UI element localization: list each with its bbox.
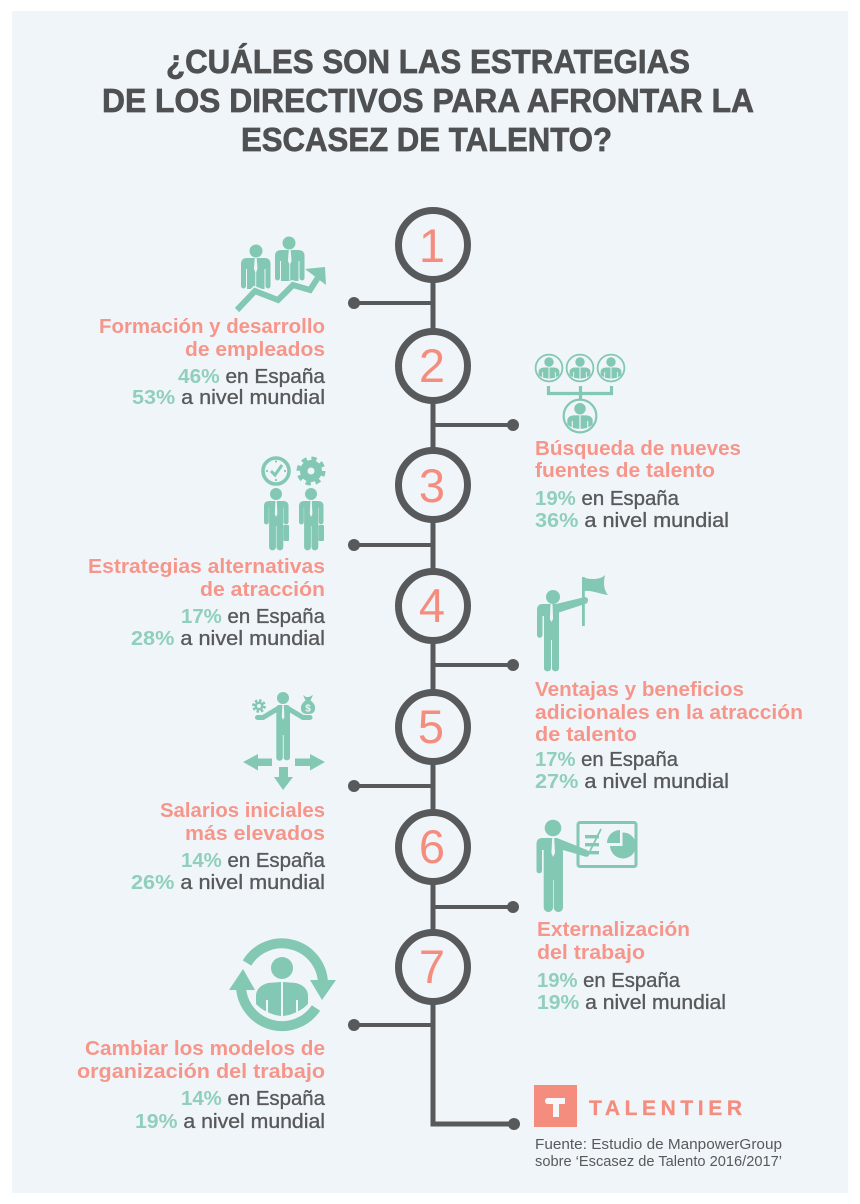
numbered circles: 4	[419, 579, 445, 632]
text block: step 4: 17% en España	[535, 748, 679, 771]
text block: step 3: 17% en España	[181, 605, 326, 628]
text block: step 6: del trabajo	[537, 941, 645, 964]
text block: step 3: 28% a nivel mundial	[131, 627, 325, 650]
timeline: vertical line, branches and end dots	[348, 245, 520, 1130]
text block: step 4: 27% a nivel mundial	[535, 770, 729, 793]
text block: step 5: más elevados	[185, 822, 325, 845]
title	[102, 43, 754, 158]
text block: step 1: de empleados	[185, 338, 325, 361]
text block: step 5	[131, 799, 326, 894]
text block: step 1	[99, 315, 326, 409]
text block: step 7: organización del trabajo	[77, 1060, 325, 1083]
text block: step 2	[535, 437, 741, 532]
numbered circles: 5	[418, 700, 444, 753]
numbered circles: 7	[419, 940, 445, 993]
text block: step 6: Externalización	[537, 918, 690, 941]
text block: step 2: 19% en España	[535, 487, 680, 510]
text block: step 5: 26% a nivel mundial	[131, 871, 325, 894]
text block: step 2: Búsqueda de nueves	[535, 437, 741, 460]
title: ESCASEZ DE TALENTO?	[241, 121, 612, 158]
text block: step 4	[535, 678, 803, 793]
numbered circles: 3	[419, 459, 445, 512]
text block: step 1: Formación y desarrollo	[99, 315, 325, 338]
text block: step 4: de talento	[535, 723, 637, 746]
icon: two employees with clock and gear	[263, 458, 324, 550]
icon: person inside circular arrows	[229, 943, 336, 1026]
icon: man holding a flag	[537, 575, 608, 671]
text block: step 7: 14% en España	[181, 1087, 326, 1110]
text block: step 4: adicionales en la atracción	[535, 701, 803, 724]
text block: step 2: fuentes de talento	[535, 459, 715, 482]
title: ¿CUÁLES SON LAS ESTRATEGIAS	[166, 43, 690, 80]
text block: step 2: 36% a nivel mundial	[535, 509, 729, 532]
icon: two employees with rising arrow	[237, 236, 326, 310]
icon: man presenting a chart on a board	[536, 820, 636, 912]
numbered circles: 1	[419, 219, 445, 272]
source note: sobre ‘Escasez de Talento 2016/2017’	[535, 1153, 782, 1170]
text block: step 5: 14% en España	[181, 849, 326, 872]
text block: step 7: Cambiar los modelos de	[85, 1037, 325, 1060]
icon: man balancing gear and money with three arrows: $	[305, 704, 311, 714]
text block: step 7: 19% a nivel mundial	[135, 1110, 325, 1133]
source note: Fuente: Estudio de ManpowerGroup	[535, 1136, 782, 1153]
text block: step 6: 19% en España	[537, 969, 681, 992]
icon: network of talent sources	[536, 355, 624, 432]
text block: step 3: Estrategias alternativas	[88, 555, 325, 578]
text block: step 7	[77, 1037, 326, 1133]
text block: step 5: Salarios iniciales	[160, 799, 325, 822]
text block: step 6: 19% a nivel mundial	[537, 991, 726, 1014]
icon: man balancing gear and money with three arrows	[243, 692, 325, 790]
numbered circles: 6	[419, 820, 445, 873]
numbered circles	[398, 210, 468, 1002]
text block: step 4: Ventajas y beneficios	[535, 678, 744, 701]
text block: step 3	[88, 555, 326, 650]
logo: Talentier: TALENTIER	[589, 1097, 742, 1120]
text block: step 3: de atracción	[200, 578, 325, 601]
text block: step 6	[537, 918, 726, 1014]
text block: step 1: 53% a nivel mundial	[132, 386, 325, 409]
title: DE LOS DIRECTIVOS PARA AFRONTAR LA	[102, 82, 754, 119]
text block: step 1: 46% en España	[178, 365, 326, 388]
logo: Talentier	[534, 1085, 742, 1127]
source note	[535, 1136, 782, 1170]
numbered circles: 2	[419, 339, 445, 392]
